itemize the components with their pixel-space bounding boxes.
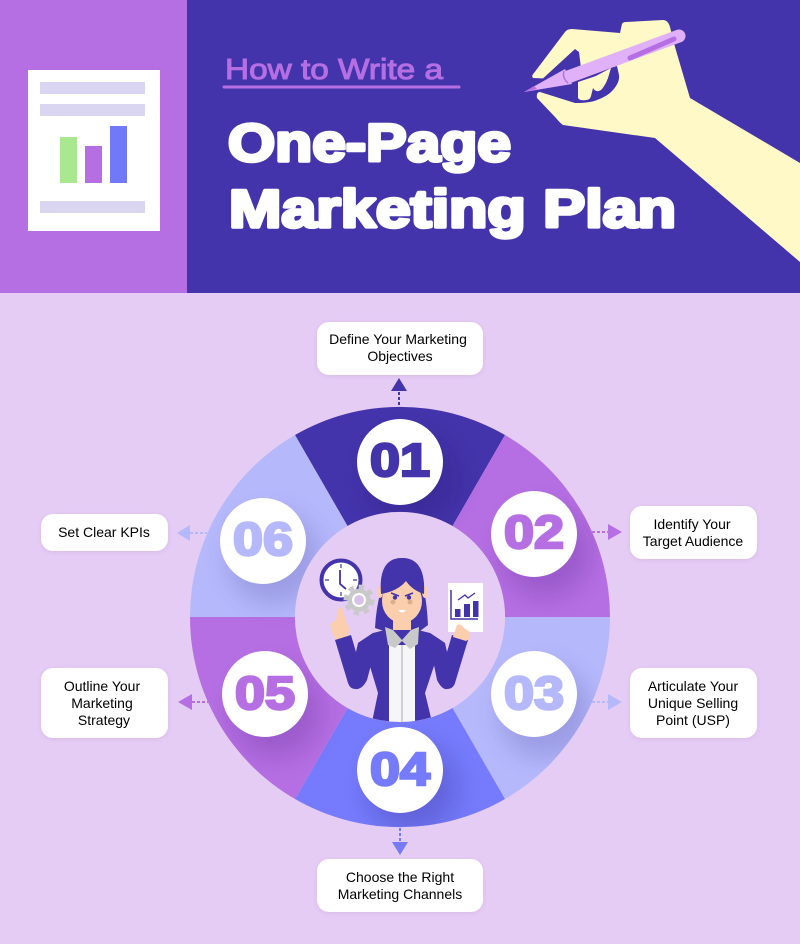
- step 3 badge: [491, 651, 577, 737]
- segment 6: [190, 435, 348, 617]
- card: step 5: Strategy: [78, 712, 130, 728]
- card: step 2: [630, 506, 757, 559]
- pen: [524, 69, 572, 92]
- facial features: [390, 593, 413, 612]
- step 4 badge: [357, 727, 443, 813]
- card: step 4: Marketing Channels: [338, 886, 462, 902]
- step 5 badge: [222, 651, 308, 737]
- fingers: [578, 76, 596, 100]
- title: Marketing Plan: [229, 180, 676, 239]
- segment 4: [295, 708, 505, 827]
- card: step 5: [41, 668, 168, 738]
- card: step 3: Point (USP): [656, 712, 730, 728]
- step 3 badge: 03: [504, 667, 564, 719]
- card: step 2: Identify Your: [653, 516, 731, 532]
- arrow: step 3: [592, 694, 622, 710]
- hair: [375, 558, 428, 631]
- title: [228, 114, 676, 239]
- card: step 3: [630, 668, 757, 738]
- centre circle: [295, 512, 505, 722]
- hand pointing: [330, 607, 349, 640]
- card: step 4: Choose the Right: [346, 869, 454, 885]
- arrow: step 6: [177, 525, 207, 541]
- jacket: [358, 630, 445, 722]
- step 1 badge: [357, 419, 443, 505]
- card: step 6: [41, 514, 168, 551]
- ears: [377, 586, 428, 598]
- collar: [385, 627, 419, 649]
- chart paper: [448, 583, 483, 632]
- step 1 badge: 01: [370, 434, 430, 486]
- card: step 6: Set Clear KPIs: [58, 524, 150, 540]
- icon: report document: [28, 70, 160, 231]
- right arm: [427, 633, 468, 689]
- card: step 3: Articulate Your: [648, 678, 738, 694]
- segment 5: [190, 617, 348, 799]
- card: step 2: Target Audience: [643, 533, 743, 549]
- neck and face: [393, 620, 411, 630]
- arrow: step 4: [392, 828, 408, 855]
- left header block: [0, 0, 187, 293]
- segment 1: [295, 407, 505, 526]
- card: step 1: Objectives: [367, 348, 433, 364]
- step 5 badge: 05: [235, 667, 295, 719]
- icon: gear: [346, 586, 372, 614]
- donut chart: [190, 407, 610, 834]
- step 6 badge: 06: [233, 513, 293, 565]
- icon: clock: [322, 560, 360, 600]
- arrow: step 5: [178, 694, 208, 710]
- segment 3: [452, 617, 610, 799]
- step 4 badge: 04: [370, 743, 430, 795]
- card: step 1: [317, 322, 483, 375]
- card: step 5: Outline Your: [64, 678, 140, 694]
- left arm: [335, 633, 376, 689]
- soft shadows: [228, 434, 591, 834]
- icon: hand holding pen: [524, 20, 800, 262]
- step 2 badge: 02: [504, 506, 564, 558]
- subtitle: How to Write a: [225, 54, 444, 86]
- step 2 badge: [491, 491, 577, 577]
- title: One-Page: [228, 114, 511, 173]
- shirt: [389, 645, 415, 725]
- card: step 3: Unique Selling: [648, 695, 738, 711]
- segment 2: [452, 435, 610, 617]
- step 6 badge: [220, 498, 306, 584]
- arrow: step 1: [391, 378, 407, 405]
- illustration: woman with clock and chart: [322, 558, 483, 725]
- card: step 4: [317, 859, 483, 912]
- card: step 1: Define Your Marketing: [329, 331, 467, 347]
- card: step 5: Marketing: [71, 695, 133, 711]
- fringe: [381, 558, 424, 594]
- header panel: [0, 0, 800, 293]
- arrow: step 2: [592, 524, 622, 540]
- hand holding paper: [453, 624, 470, 641]
